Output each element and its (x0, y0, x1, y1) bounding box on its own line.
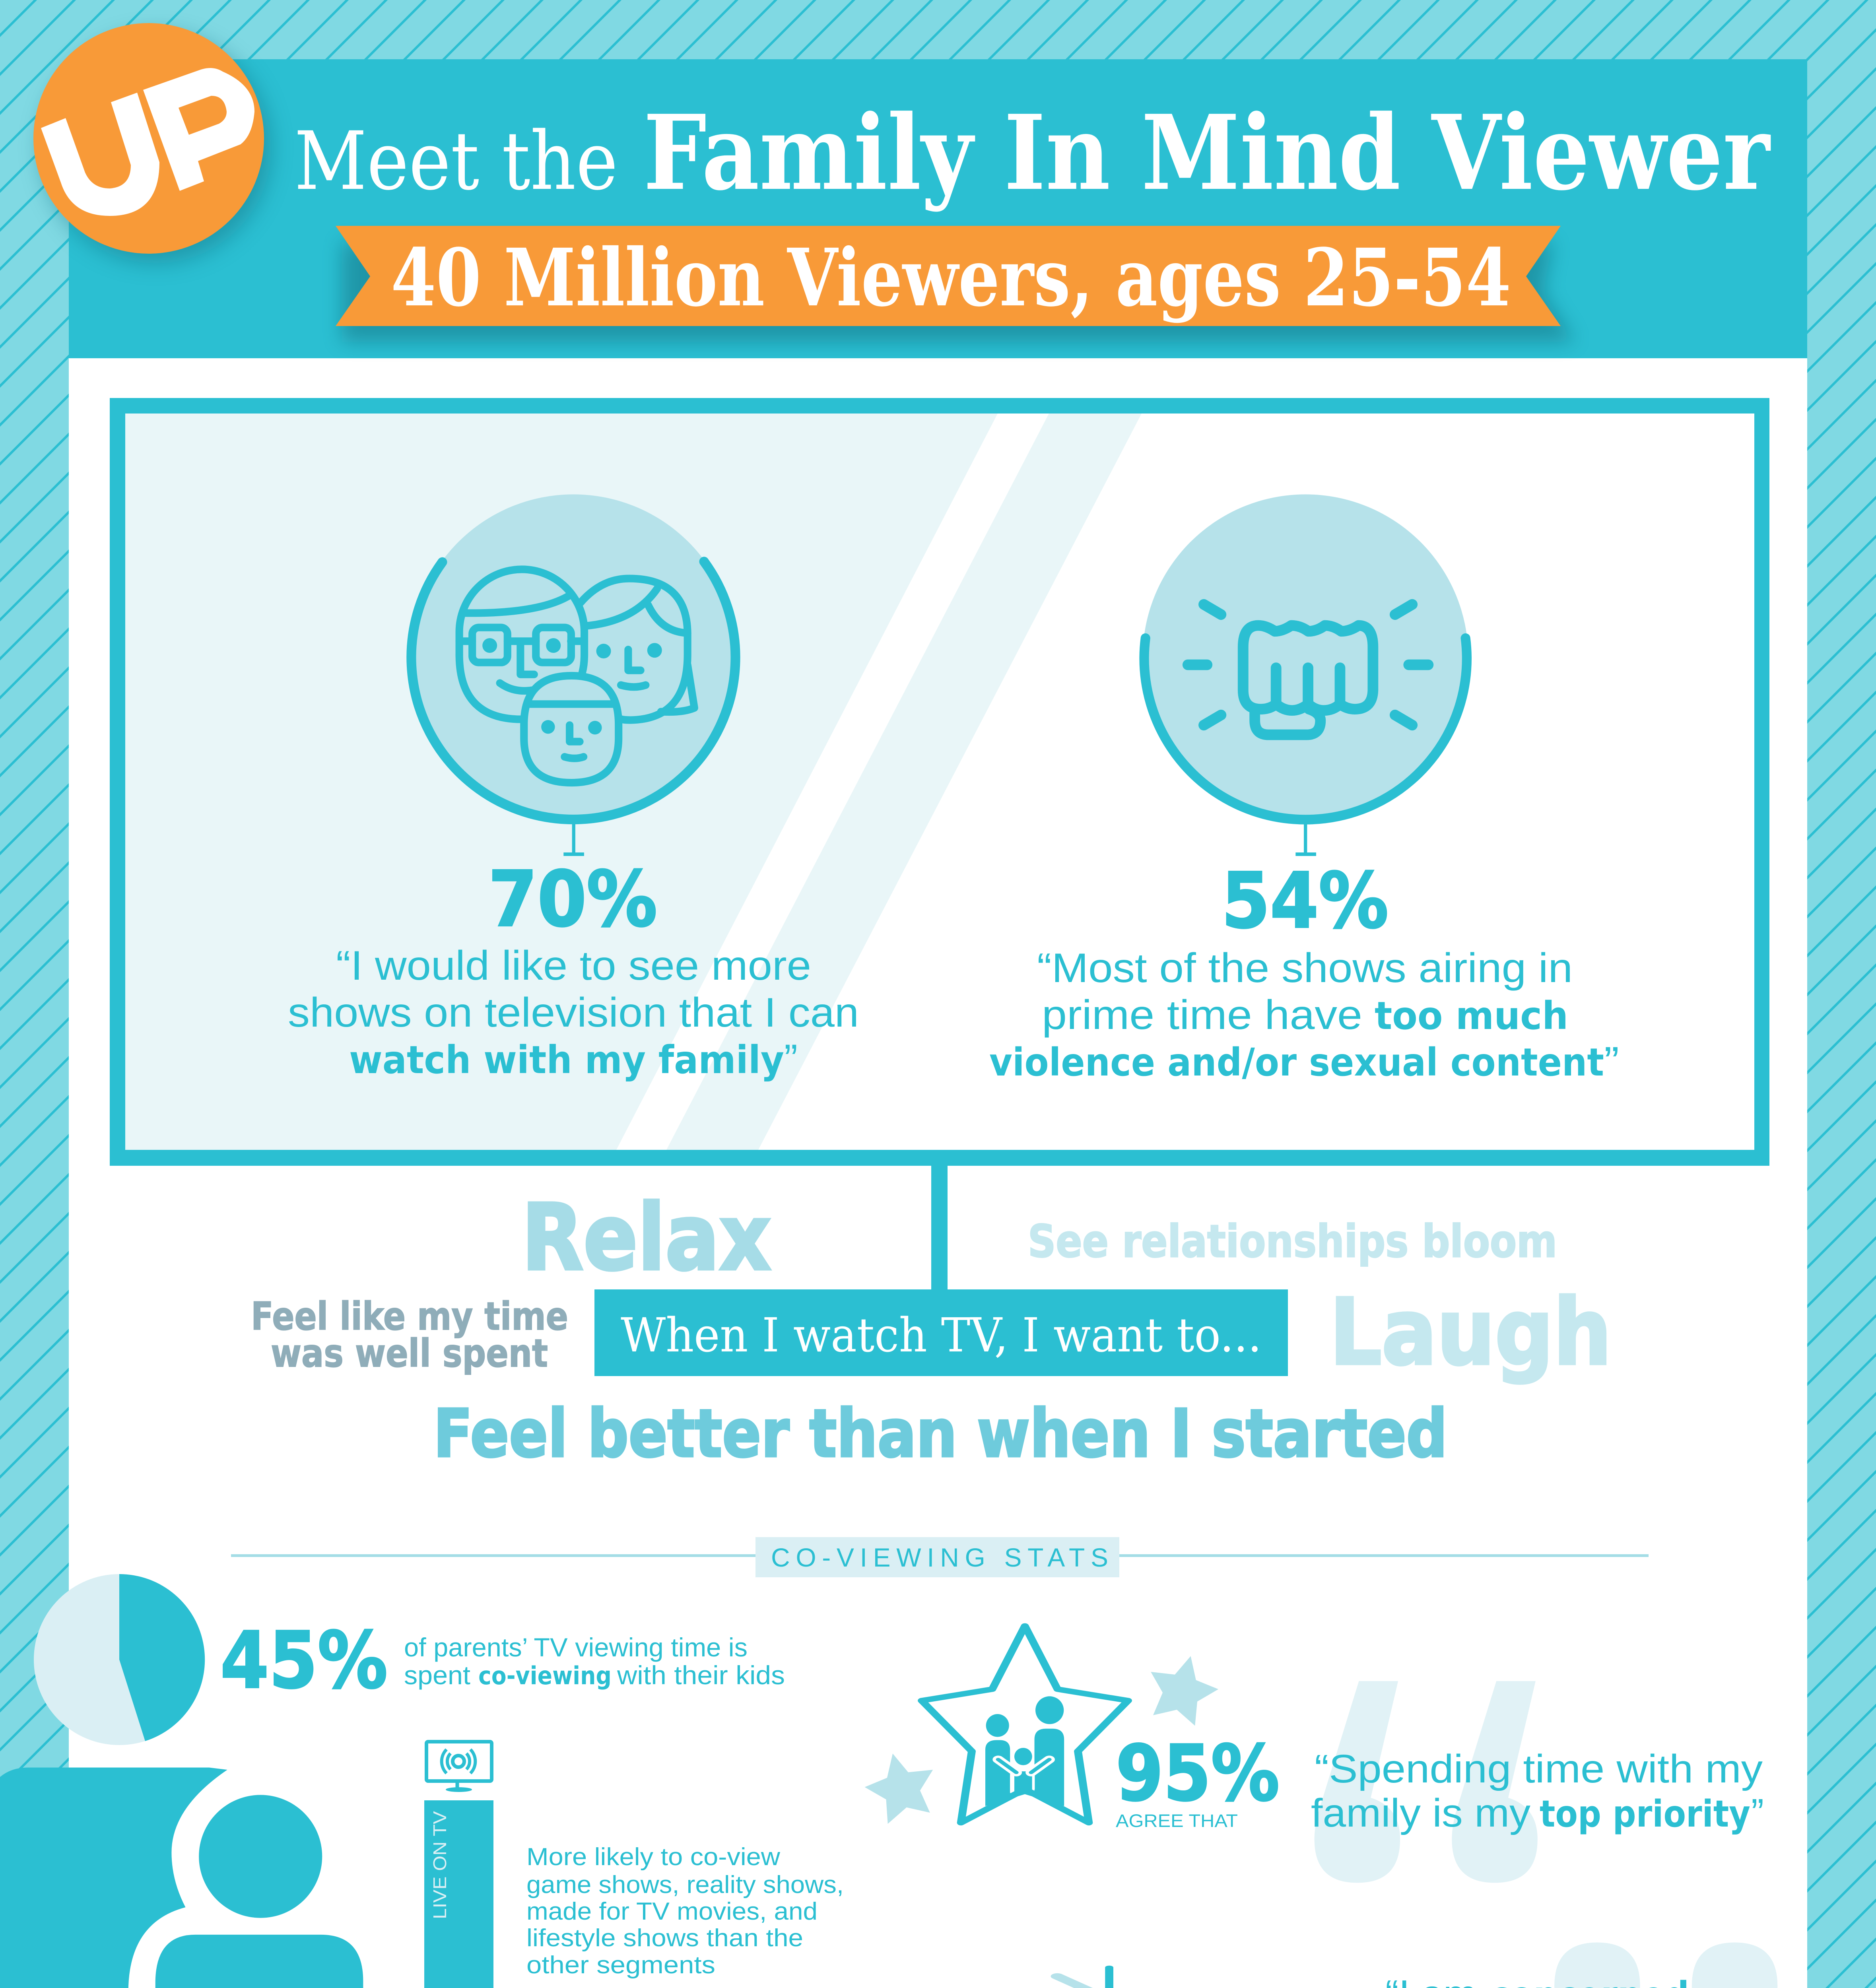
stat: 54 percent: ” (1604, 1039, 1619, 1085)
stat: 54 percent: too much (1375, 994, 1568, 1038)
logo circle shadow (41, 33, 271, 263)
stat: 54 percent: “Most of the shows airing in (1037, 945, 1573, 991)
stat: 45 percent (220, 1615, 785, 1706)
quote: exposed on tv (1338, 1972, 1739, 1988)
stat: 95 percent: AGREE THAT (1116, 1811, 1238, 1831)
icon: people watching (832, 1966, 1113, 1988)
quote: top priority: family is my (1311, 1791, 1530, 1835)
stat: 70 percent: shows on television that I can (288, 990, 859, 1036)
stat: 95 percent: 95% (1116, 1729, 1280, 1818)
word cloud: See relationships bloom (1028, 1216, 1557, 1268)
quote: top priority: “Spending time with my (1315, 1747, 1763, 1791)
quote marks (1315, 1681, 1777, 1988)
text block: more likely to co-view: made for TV movies, and (526, 1898, 818, 1925)
family figures (985, 1696, 1064, 1806)
section heading: co-viewing stats: CO-VIEWING STATS (771, 1543, 1108, 1572)
word cloud: Relax (522, 1185, 771, 1291)
stat: 45 percent: with their kids (617, 1660, 785, 1690)
stat: 45 percent: of parents’ TV viewing time is (404, 1633, 748, 1662)
icon: parent and child silhouettes (0, 1768, 363, 1988)
quote: top priority (1311, 1747, 1764, 1835)
quote: top priority: top priority (1540, 1792, 1750, 1835)
stat: 70 percent: watch with my family (349, 1038, 784, 1082)
connector stem (931, 1166, 948, 1293)
stat: 54 percent: prime time have (1042, 992, 1362, 1038)
text block: more likely to co-view: other segments (526, 1951, 715, 1979)
header band (69, 59, 1807, 358)
word cloud: Feel like my time (251, 1294, 568, 1339)
bar: live on tv (424, 1800, 493, 1988)
letter shape P (143, 68, 254, 191)
stat: 45 percent: spent (404, 1660, 470, 1690)
pie chart: 45 percent (34, 1574, 205, 1745)
prompt box (594, 1289, 1288, 1376)
text block: more likely to co-view (526, 1843, 844, 1979)
small star right (1151, 1656, 1218, 1726)
section heading: co-viewing stats (231, 1537, 1649, 1577)
icon: fist circle (1143, 494, 1468, 854)
panel: main stats frame (110, 398, 1769, 1166)
quote: top priority: ” (1751, 1791, 1764, 1835)
stat: 70 percent: ” (784, 1036, 798, 1082)
ribbon shadow (342, 242, 1575, 342)
prompt box: When I watch TV, I want to... (621, 1308, 1262, 1363)
star outline (922, 1626, 1128, 1823)
word cloud: Feel better than when I started (433, 1396, 1447, 1472)
stat: 70 percent (288, 855, 859, 1082)
text block: more likely to co-view: More likely to co-view (526, 1843, 780, 1871)
title: Meet the (294, 114, 618, 208)
letter shape U (41, 93, 159, 216)
word cloud (251, 1185, 1612, 1472)
text block: more likely to co-view: lifestyle shows than the (526, 1924, 803, 1952)
icon: family circle (411, 494, 736, 854)
orange ribbon (336, 226, 1561, 326)
icon: family star (865, 1626, 1218, 1824)
stat: 45 percent: 45% (220, 1615, 388, 1706)
stat: 45 percent: co-viewing (478, 1661, 612, 1690)
bar: live on tv: LIVE ON TV (429, 1811, 450, 1919)
word cloud: Laugh (1330, 1279, 1612, 1386)
UP logo (33, 23, 264, 254)
stat: 70 percent: 70% (488, 855, 657, 944)
icon: live tv (426, 1741, 491, 1792)
stat: 54 percent: violence and/or sexual content (989, 1040, 1604, 1085)
bar chart: co-viewing by platform (424, 1741, 793, 1988)
text block: more likely to co-view: game shows, reality shows, (526, 1871, 844, 1899)
stat: 70 percent: “I would like to see more (336, 943, 811, 989)
stat: 54 percent: 54% (1222, 857, 1389, 945)
word cloud: was well spent (271, 1331, 548, 1376)
ribbon text: 40 Million Viewers, ages 25-54 (391, 231, 1511, 324)
stat: 54 percent (989, 857, 1619, 1085)
small star left (865, 1753, 933, 1824)
